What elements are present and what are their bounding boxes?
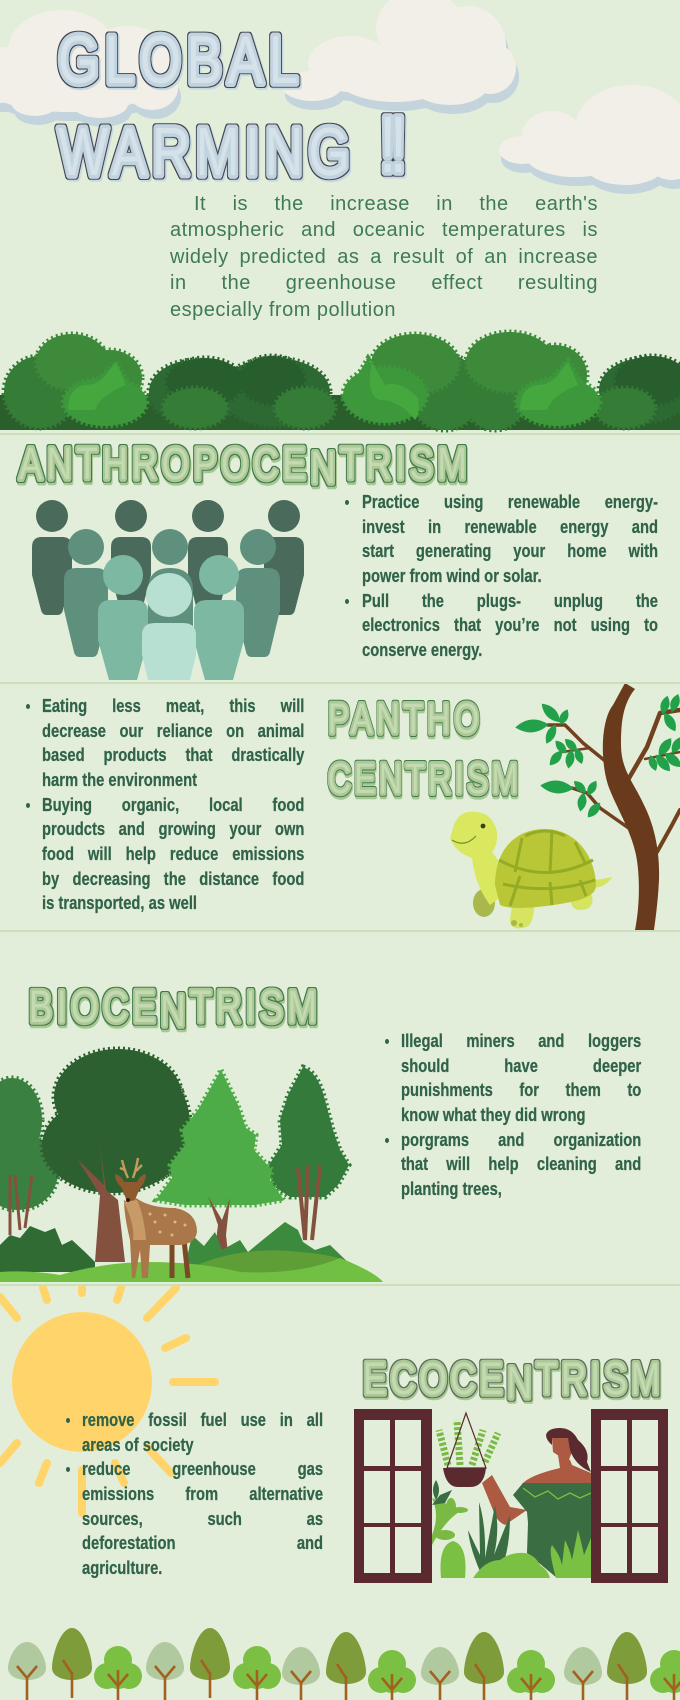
cloud: top left: [0, 10, 181, 127]
text block: ecocentrism actions: deforestation and: [82, 1533, 323, 1553]
cloud: right: [499, 85, 680, 194]
text block: panthocentrism actions: is transported, as well: [42, 893, 197, 913]
hanging plant: [439, 1413, 498, 1487]
title: !!: [379, 101, 407, 190]
text block: panthocentrism actions: proudcts and growing your own: [42, 819, 304, 839]
text block: ecocentrism actions: remove fossil fuel use in all: [82, 1410, 323, 1430]
heading: anthropocentrism: ANTHROPOCE: [19, 438, 306, 489]
heading: pantho centrism: PANTHO: [328, 695, 479, 743]
illustration: forest: [0, 1049, 383, 1282]
text block: anthropocentrism actions: [345, 492, 658, 660]
text block: panthocentrism actions: Eating less meat, this will: [42, 696, 304, 716]
text block: biocentrism actions: planting trees,: [401, 1179, 502, 1199]
text block: panthocentrism actions: food will help reduce emissions: [42, 844, 304, 864]
heading: biocentrism: N: [160, 985, 186, 1036]
text block: biocentrism actions: [385, 1031, 642, 1200]
deer: [115, 1158, 197, 1278]
text block: anthropocentrism actions: Practice using renewable energy-: [362, 492, 658, 512]
heading: ecocentrism: ECOCE: [363, 1353, 503, 1404]
heading: anthropocentrism: TRISM: [340, 438, 467, 489]
text block: definition: in the greenhouse effect resulting: [170, 272, 598, 294]
text block: panthocentrism actions: [26, 696, 304, 914]
text block: anthropocentrism actions: Pull the plugs- unplug the: [362, 591, 658, 611]
text block: anthropocentrism actions: conserve energy.: [362, 640, 482, 660]
text block: biocentrism actions: that will help cleaning and: [401, 1154, 641, 1174]
text block: anthropocentrism actions: electronics that you’re not using to: [362, 615, 658, 635]
cloud: top centre: [282, 0, 519, 114]
heading: ecocentrism: TRISM: [536, 1353, 660, 1404]
heading: ecocentrism: N: [507, 1357, 532, 1408]
illustration: crowd of people: [32, 500, 304, 680]
bushes row: [0, 332, 680, 430]
text block: definition: [170, 193, 598, 321]
text block: ecocentrism actions: emissions from alternative: [82, 1484, 323, 1504]
title: [58, 22, 407, 190]
illustration: turtle: [450, 812, 612, 928]
heading: pantho centrism: CENTRISM: [328, 755, 518, 803]
text block: biocentrism actions: Illegal miners and loggers: [401, 1031, 641, 1051]
text block: panthocentrism actions: harm the environment: [42, 770, 197, 790]
potted plants: [432, 1480, 591, 1578]
illustration: woman at window with plants: [354, 1409, 668, 1583]
text block: definition: atmospheric and oceanic temperatures is: [170, 219, 598, 241]
text block: ecocentrism actions: sources, such as: [82, 1509, 323, 1529]
heading: biocentrism: BIOCE: [29, 981, 156, 1032]
title: WARMING: [58, 114, 350, 189]
text block: biocentrism actions: know what they did wrong: [401, 1105, 586, 1125]
text block: biocentrism actions: should have deeper: [401, 1056, 641, 1076]
text block: definition: It is the increase in the earth's: [194, 193, 598, 215]
window frames: [354, 1409, 668, 1583]
heading: anthropocentrism: N: [310, 442, 336, 493]
heading: biocentrism: TRISM: [190, 981, 317, 1032]
text block: ecocentrism actions: [66, 1410, 323, 1578]
title: GLOBAL: [58, 22, 298, 97]
text block: panthocentrism actions: Buying organic, local food: [42, 795, 304, 815]
text block: panthocentrism actions: based products that drastically: [42, 745, 304, 765]
text block: ecocentrism actions: agriculture.: [82, 1558, 162, 1578]
text block: panthocentrism actions: by decreasing the distance food: [42, 869, 304, 889]
text block: definition: especially from pollution: [170, 299, 396, 321]
text block: ecocentrism actions: areas of society: [82, 1435, 194, 1455]
heading: pantho centrism: [328, 695, 518, 803]
illustration: tree with leaves: [515, 683, 680, 930]
row of small trees: [8, 1628, 680, 1700]
illustration: sun: [0, 1288, 215, 1513]
text block: definition: widely predicted as a result of an increase: [170, 246, 598, 268]
text block: anthropocentrism actions: start generating your home with: [362, 541, 658, 561]
text block: anthropocentrism actions: power from wind or solar.: [362, 566, 542, 586]
text block: biocentrism actions: porgrams and organization: [401, 1130, 641, 1150]
text block: anthropocentrism actions: invest in renewable energy and: [362, 517, 658, 537]
text block: panthocentrism actions: decrease our reliance on animal: [42, 721, 304, 741]
text block: ecocentrism actions: reduce greenhouse gas: [82, 1459, 323, 1479]
text block: biocentrism actions: punishments for them to: [401, 1080, 641, 1100]
